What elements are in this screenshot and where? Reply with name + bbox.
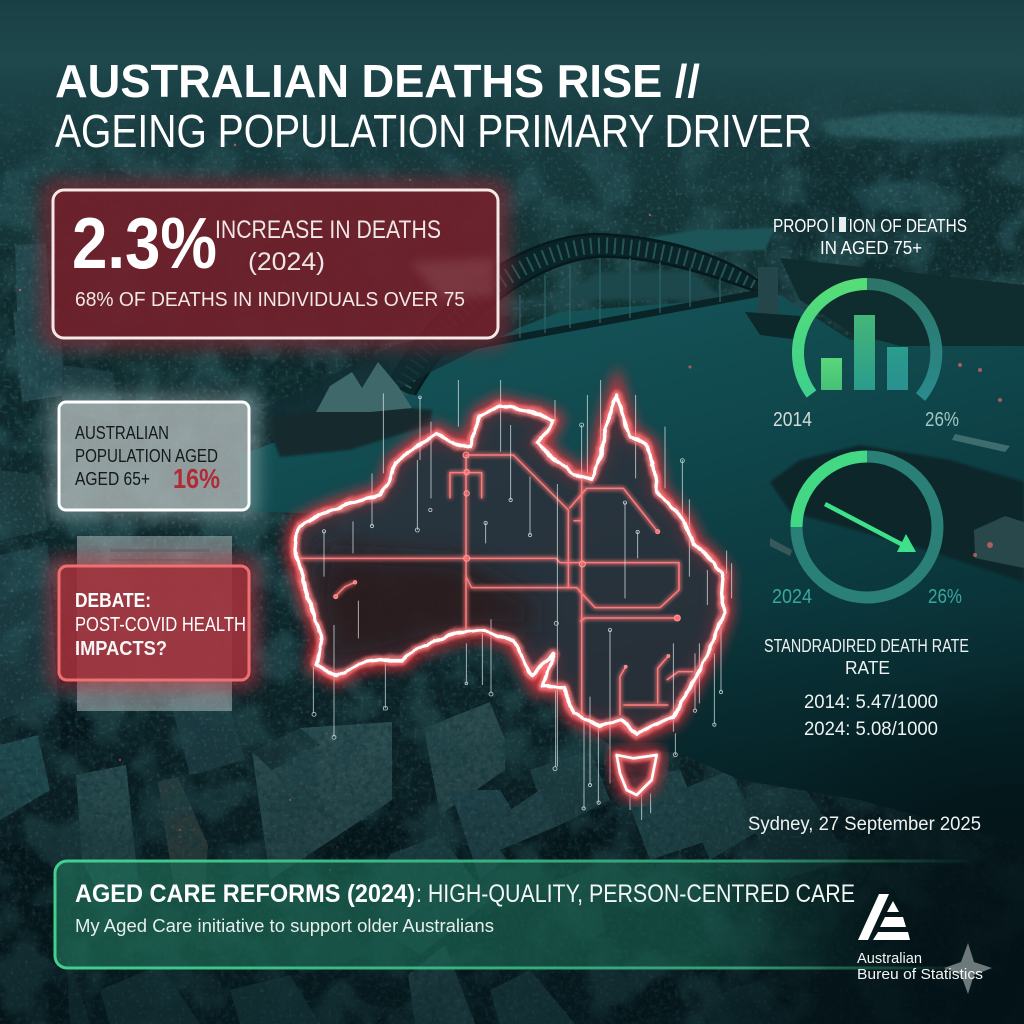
panel: aged care reforms: AGED CARE REFORMS (2024): [75, 880, 415, 908]
title: [55, 55, 812, 157]
darkened city seen through the map: [317, 553, 533, 663]
heading: proportion of deaths: IN AGED 75+: [820, 238, 922, 258]
heading: proportion of deaths: [773, 215, 967, 258]
icon: sparkle: [944, 943, 992, 994]
panel: aged care reforms: [55, 861, 975, 968]
logo: Australian Bureau of Statistics: Australian: [857, 951, 922, 967]
panel: 2.3% increase in deaths: (2024): [248, 248, 325, 276]
logo: Australian Bureau of Statistics: [857, 894, 992, 994]
text block: standardised death rate: 2024: 5.08/1000: [804, 719, 938, 740]
panel: population aged 65+: AUSTRALIAN: [75, 423, 169, 443]
tasmania: [617, 755, 657, 795]
gauge: 2024 with arrow: 26%: [928, 586, 962, 608]
Harbour Bridge: [385, 234, 760, 395]
panel: debate on post-covid health impacts: IMPACTS?: [75, 638, 167, 660]
panel: population aged 65+: 16%: [173, 463, 220, 494]
peninsula: [770, 445, 1024, 582]
Opera House platform: [265, 402, 432, 457]
map of Australia with glowing outline and network: [295, 380, 732, 820]
panel: 2.3% increase in deaths: 68% OF DEATHS IN INDIVIDUALS OVER 75: [75, 289, 465, 311]
internal red network lines: [298, 455, 693, 718]
gauge: 2024 with arrow: [772, 456, 962, 608]
text block: standardised death rate: [764, 636, 969, 740]
gauge: 2014 with bars: [773, 284, 959, 431]
panel: 2.3% increase in deaths: [40, 178, 510, 350]
coastline: [295, 395, 723, 733]
coastline outer glow: [295, 395, 723, 733]
text block: standardised death rate: RATE: [845, 658, 890, 678]
panel: debate on post-covid health impacts: POST-COVID HEALTH: [75, 614, 246, 636]
gauge: 2024 with arrow: 2024: [772, 586, 812, 608]
panel: population aged 65+: POPULATION AGED: [75, 446, 218, 466]
panel: 2.3% increase in deaths: INCREASE IN DEATHS: [215, 216, 441, 244]
land fill: [295, 395, 723, 733]
text block: standardised death rate: 2014: 5.47/1000: [804, 692, 938, 713]
gauge: 2014 with bars: 26%: [925, 409, 959, 431]
buildings: [0, 690, 990, 1024]
arrow: [825, 504, 916, 552]
text block: standardised death rate: STANDRADIRED DEATH RATE: [764, 636, 969, 656]
panel: population aged 65+: AGED 65+: [75, 469, 150, 489]
gauge: 2014 with bars: 2014: [773, 409, 812, 431]
panel: debate on post-covid health impacts: DEBATE:: [75, 590, 151, 612]
panel: aged care reforms: : HIGH-QUALITY, PERSON-CENTRED CARE: [416, 880, 855, 908]
dateline: Sydney, 27 September 2025: [748, 814, 981, 835]
white data pins: [312, 380, 732, 820]
panel: debate on post-covid health impacts: [48, 536, 260, 711]
heading: proportion of deaths: PROPORTION OF DEATHS: [773, 216, 967, 236]
logo: Australian Bureau of Statistics: Bureu of Statistics: [857, 967, 983, 983]
north shore: [780, 258, 1024, 346]
panel: population aged 65+: [48, 392, 260, 520]
title: AGEING POPULATION PRIMARY DRIVER: [55, 105, 812, 157]
bar chart: [821, 315, 908, 390]
title: AUSTRALIAN DEATHS RISE //: [55, 55, 700, 107]
panel: 2.3% increase in deaths: 2.3%: [72, 204, 217, 284]
harbour water: [240, 295, 1024, 845]
panel: aged care reforms: My Aged Care initiative to support older Australians: [75, 916, 494, 936]
